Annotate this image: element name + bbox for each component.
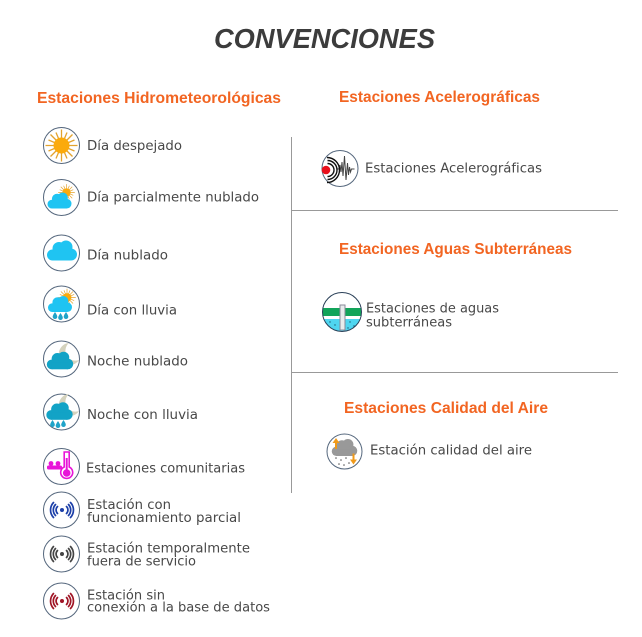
panel: estaciones hidrometeorológicas: [37, 90, 281, 619]
item: estación temporalmente fuera de servicio: Estación temporalmente: [87, 540, 250, 556]
item: noche con lluvia: Noche con lluvia: [87, 407, 198, 423]
item: estación sin conexión: [44, 583, 270, 619]
item: día nublado: [44, 235, 168, 271]
icon: pozo: [322, 292, 362, 333]
item: noche nublado: Noche nublado: [87, 354, 188, 370]
heading: calidad del aire: Estaciones Calidad del Aire: [344, 400, 548, 417]
panel: estaciones acelerográficas: [322, 89, 542, 186]
item: día despejado: Día despejado: [87, 138, 182, 154]
heading: hidrometeorológicas: Estaciones Hidrometeorológicas: [37, 90, 281, 107]
text: estaciones de aguas subterráneas: Estaciones de aguas: [366, 300, 499, 316]
panel: estaciones calidad del aire: [327, 400, 548, 469]
item: día parcialmente nublado: [44, 180, 259, 216]
item: estaciones comunitarias: Estaciones comunitarias: [86, 460, 245, 476]
item: noche nublado: [44, 341, 188, 377]
item: día despejado: [44, 128, 182, 164]
item: estación con funcionamiento parcial: [44, 492, 241, 528]
item: día con lluvia: Día con lluvia: [87, 302, 177, 318]
item: estación temporalmente fuera de servicio: fuera de servicio: [87, 554, 196, 570]
text: estación calidad del aire: Estación calidad del aire: [370, 442, 532, 458]
text: estaciones acelerográficas: Estaciones Acelerográficas: [365, 160, 542, 176]
item: día parcialmente nublado: Día parcialmente nublado: [87, 190, 259, 206]
heading: acelerográficas: Estaciones Acelerográficas: [339, 89, 540, 106]
item: estación sin conexión: Estación sin: [87, 588, 165, 604]
item: estaciones comunitarias: [44, 448, 245, 484]
title: CONVENCIONES: [214, 23, 435, 54]
item: estación con funcionamiento parcial: funcionamiento parcial: [87, 510, 241, 526]
item: día con lluvia: [44, 286, 177, 322]
item: estación temporalmente fuera de servicio: [44, 536, 250, 572]
heading: aguas subterráneas: Estaciones Aguas Subterráneas: [339, 241, 572, 258]
item: día nublado: Día nublado: [87, 248, 168, 264]
icon: calidad del aire: [327, 434, 362, 469]
item: estación con funcionamiento parcial: Estación con: [87, 497, 171, 513]
item: estación sin conexión: conexión a la base de datos: [87, 600, 270, 616]
panel: estaciones aguas subterráneas: [322, 241, 572, 333]
item: noche con lluvia: [44, 394, 198, 430]
text: estaciones de aguas subterráneas: [366, 300, 499, 330]
icon: sismógrafo: [322, 150, 358, 186]
text: estaciones de aguas subterráneas: subterráneas: [366, 314, 452, 330]
